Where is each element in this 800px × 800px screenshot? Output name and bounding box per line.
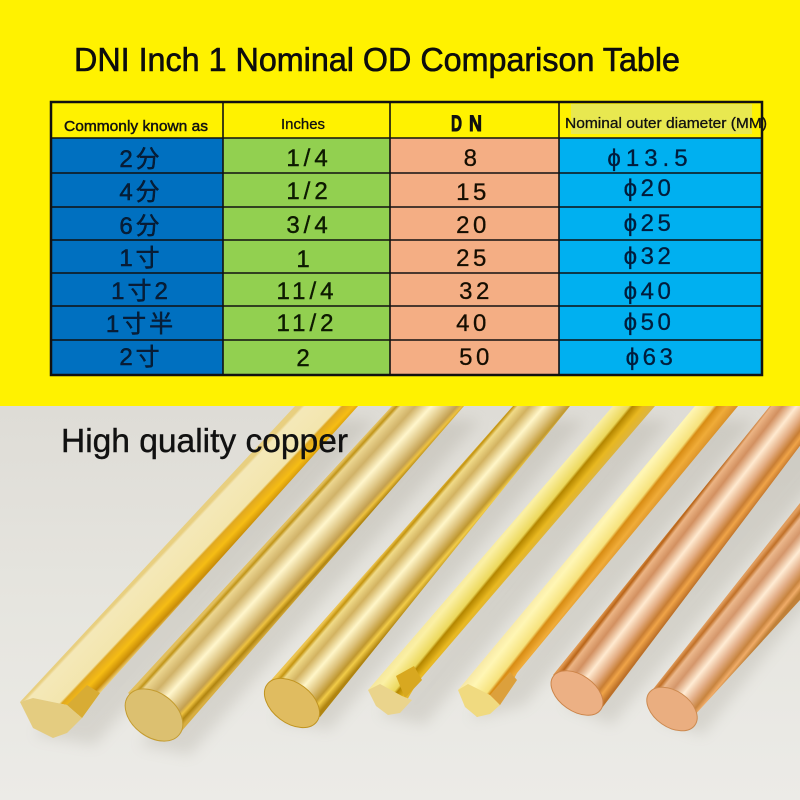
rod 6: round copper xyxy=(543,406,800,724)
column: nominal outer diameter xyxy=(607,145,693,371)
column: nominal outer diameter: ϕ13.5 xyxy=(607,145,693,172)
column: nominal outer diameter: ϕ63 xyxy=(626,344,676,371)
column: nominal outer diameter: ϕ50 xyxy=(624,309,674,336)
table header row: N xyxy=(469,111,482,136)
column: DN: 25 xyxy=(456,245,490,272)
table header row xyxy=(64,111,767,136)
column: DN: 50 xyxy=(459,344,493,371)
table header row: Commonly known as xyxy=(64,118,208,135)
column: inches: 11/4 xyxy=(277,278,337,305)
column: commonly known as: 4分 xyxy=(119,179,163,206)
comparison table xyxy=(51,102,767,375)
yellow header background xyxy=(0,0,800,406)
product photo: brass and copper rods xyxy=(0,406,800,800)
column: commonly known as: 2寸 xyxy=(119,344,163,371)
title: DNI Inch 1 Nominal OD Comparison Table xyxy=(74,41,680,78)
column: inches xyxy=(277,145,337,372)
column: nominal outer diameter: ϕ20 xyxy=(624,175,674,202)
photo background xyxy=(0,406,800,800)
column: DN: 8 xyxy=(464,145,480,172)
table column fills xyxy=(51,104,762,375)
column: commonly known as: 1寸半 xyxy=(106,311,176,338)
table header row: Inches xyxy=(281,116,325,133)
column: DN: 40 xyxy=(456,310,490,337)
rod 1: hexagonal brass xyxy=(20,406,358,738)
column: inches: 2 xyxy=(296,345,314,372)
column: inches: 11/2 xyxy=(277,310,337,337)
caption: high quality copper: High quality copper xyxy=(61,422,348,459)
table header row: Nominal outer diameter (MM) xyxy=(565,115,767,132)
rod 7: round copper xyxy=(639,503,800,740)
rod 2: round brass xyxy=(115,406,464,752)
column: DN: 32 xyxy=(459,278,493,305)
table header row: D xyxy=(451,111,462,136)
column: DN: 20 xyxy=(456,212,490,239)
column: commonly known as xyxy=(106,146,176,371)
column: DN xyxy=(456,145,493,371)
column: commonly known as: 1寸2 xyxy=(111,278,171,305)
rod 4: hexagonal brass xyxy=(368,406,655,715)
rod shadows xyxy=(35,420,800,755)
rod 5: hexagonal brass-copper xyxy=(458,406,738,717)
column: DN: 15 xyxy=(456,179,490,206)
column: inches: 1 xyxy=(296,246,314,273)
column: inches: 1/4 xyxy=(286,145,332,172)
column: nominal outer diameter: ϕ25 xyxy=(624,210,674,237)
column: nominal outer diameter: ϕ40 xyxy=(624,278,674,305)
column: commonly known as: 1寸 xyxy=(119,245,163,272)
column: inches: 3/4 xyxy=(286,212,332,239)
column: commonly known as: 6分 xyxy=(119,213,163,240)
column: inches: 1/2 xyxy=(286,178,332,205)
column: commonly known as: 2分 xyxy=(119,146,163,173)
column: nominal outer diameter: ϕ32 xyxy=(624,243,674,270)
rod 3: round brass xyxy=(255,406,570,738)
table grid lines xyxy=(51,102,762,375)
